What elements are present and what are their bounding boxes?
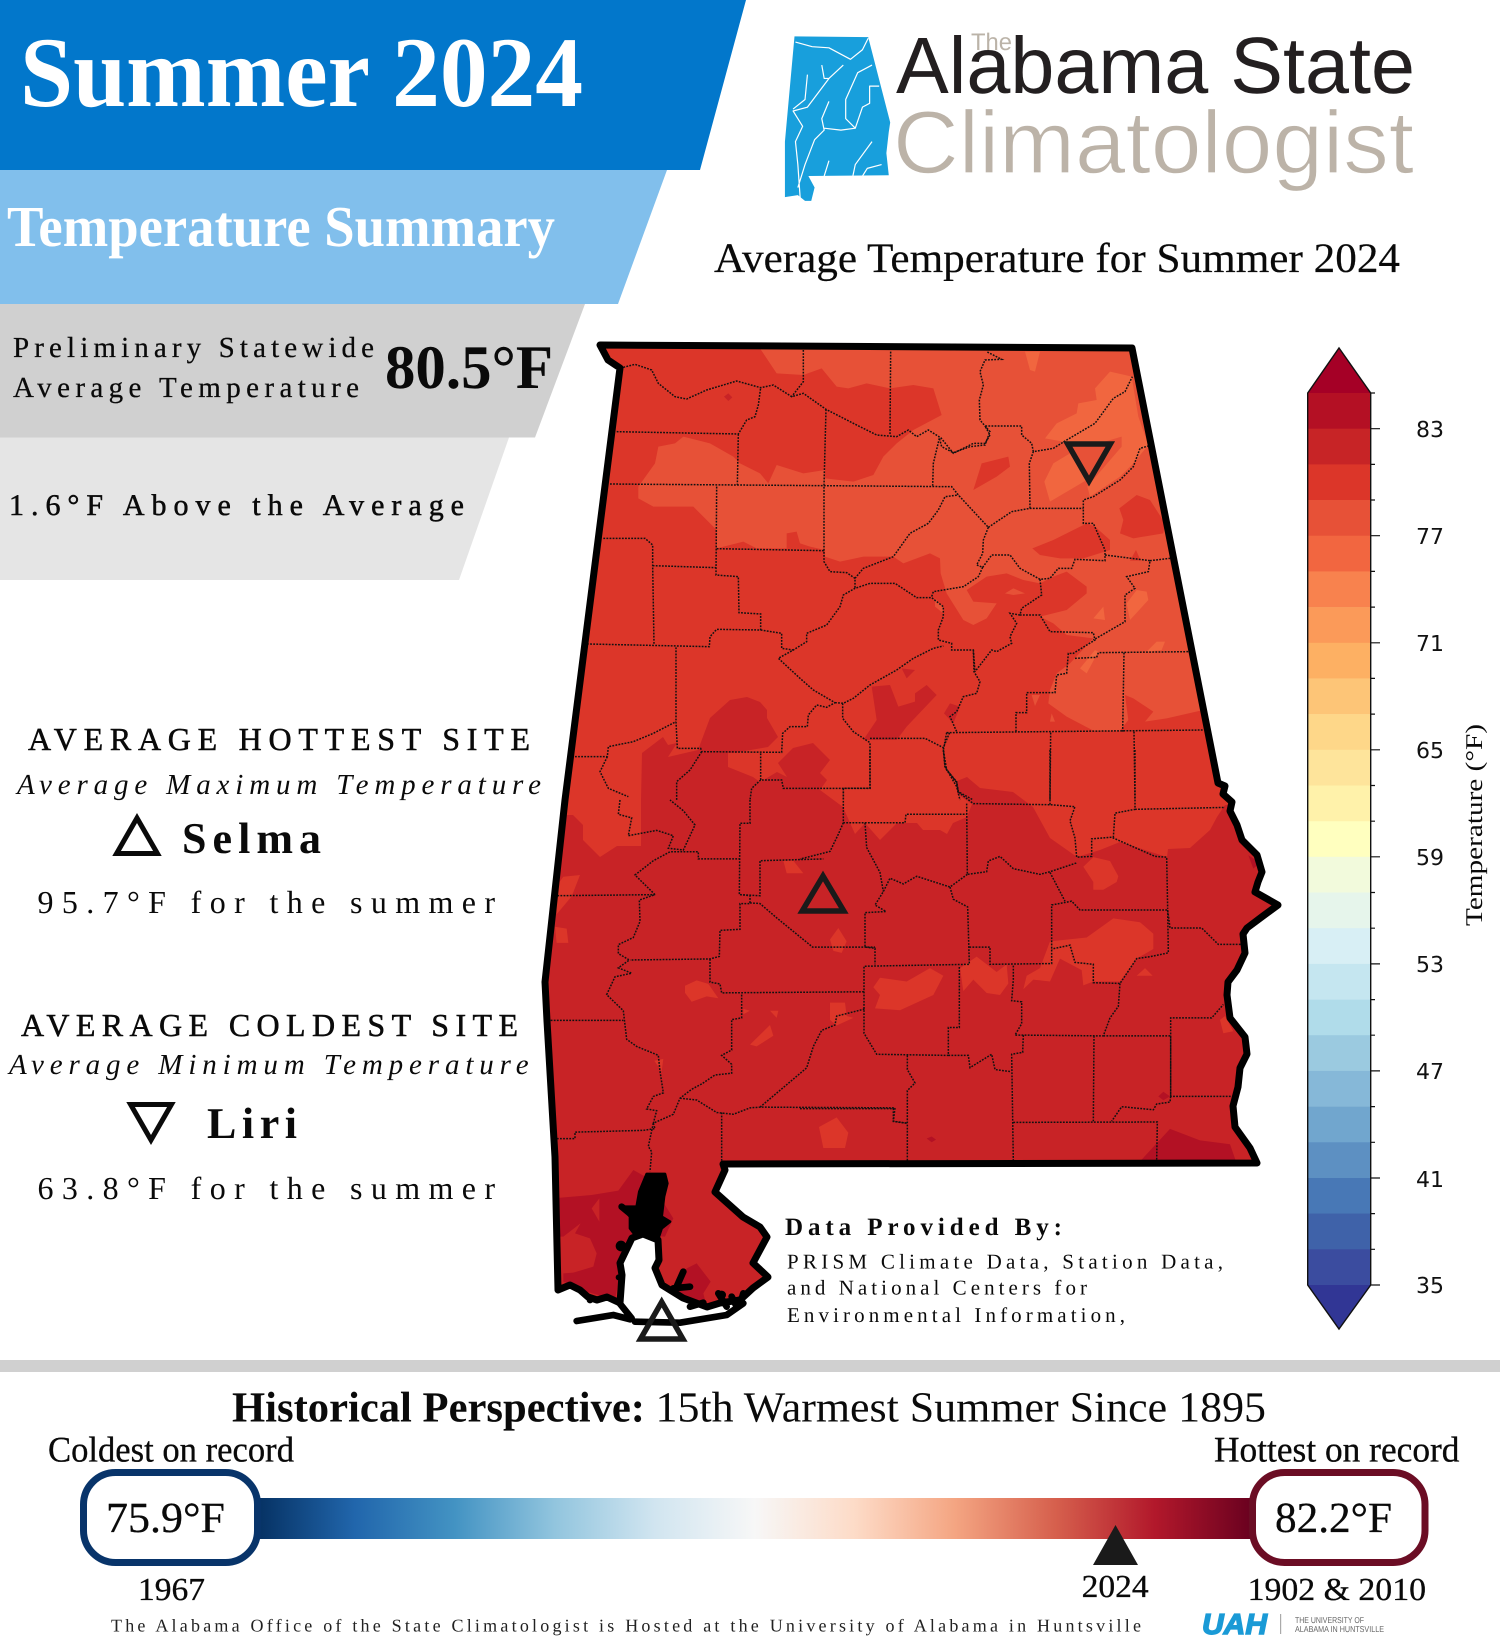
logo icon: blue Alabama map with rivers: [785, 36, 890, 201]
historical perspective heading: Historical Perspective:: [232, 1384, 645, 1432]
UAH logo: UAH: [1202, 1609, 1268, 1641]
title banner: Summer 2024: Summer 2024: [20, 17, 583, 128]
colorbar axis label: Temperature (°F): [1462, 724, 1488, 926]
map heading: Average Temperature for Summer 2024: [714, 236, 1400, 282]
panel: average coldest site: AVERAGE COLDEST SITE: [21, 1007, 518, 1043]
data source note: [785, 1214, 1223, 1327]
panel: statewide average temperature: 80.5°F: [385, 334, 553, 402]
2024 marker: 2024: [1082, 1568, 1149, 1604]
panel: statewide average temperature: Preliminary Statewide: [13, 332, 374, 364]
icon: coldest triangle: [131, 1104, 171, 1140]
panel: average hottest site: Average Maximum Temperature: [15, 769, 541, 801]
data source note: PRISM Climate Data, Station Data,: [787, 1250, 1223, 1274]
panel: average hottest site: [15, 721, 541, 920]
data source note: Data Provided By:: [785, 1214, 1062, 1241]
historical range scale: [48, 1430, 1460, 1607]
colorbar tick labels: 41: [1416, 1168, 1444, 1193]
colorbar tick labels: 47: [1416, 1060, 1444, 1085]
panel: average coldest site: 63.8°F for the summer: [38, 1170, 495, 1206]
colorbar legend: [1308, 348, 1488, 1329]
panel: average hottest site: AVERAGE HOTTEST SITE: [28, 721, 530, 757]
logo text: Climatologist: Climatologist: [893, 92, 1414, 192]
colorbar bands: [1308, 348, 1371, 1329]
marker: gulf coast triangle: [640, 1302, 683, 1339]
panel: average coldest site: [7, 1007, 529, 1206]
coldest on record callout: 1967: [138, 1571, 205, 1607]
footer hosting statement: The Alabama Office of the State Climatologist is Hosted at the University of Alabama in Huntsville: [111, 1616, 1141, 1636]
hottest on record callout: 82.2°F: [1275, 1495, 1392, 1542]
subtitle banner: Temperature Summary: [0, 170, 667, 304]
icon: hottest triangle: [117, 818, 157, 854]
coldest on record callout: Coldest on record: [48, 1430, 294, 1470]
data source note: and National Centers for: [787, 1276, 1087, 1300]
UAH logo: [1202, 1609, 1384, 1641]
historical perspective heading: [232, 1384, 1266, 1432]
title banner: Summer 2024: [0, 0, 746, 170]
panel: departure from average: 1.6°F Above the Average: [9, 489, 464, 522]
panel: average coldest site: Liri: [207, 1099, 297, 1148]
colorbar ticks: [1371, 393, 1380, 1285]
panel: statewide average temperature: [0, 304, 585, 438]
colorbar tick labels: 35: [1416, 1274, 1444, 1299]
logo text: The: The: [971, 29, 1012, 56]
coldest on record callout: 75.9°F: [106, 1495, 225, 1542]
2024 marker: [1082, 1525, 1149, 1604]
gradient bar: [255, 1498, 1255, 1539]
colorbar tick labels: 83: [1416, 418, 1444, 443]
UAH logo: ALABAMA IN HUNTSVILLE: [1295, 1624, 1384, 1634]
choropleth map of Alabama: [530, 330, 1310, 1350]
marker: hottest site Selma: [802, 876, 844, 911]
colorbar tick labels: 65: [1416, 739, 1444, 764]
subtitle banner: Temperature Summary: Temperature Summary: [7, 194, 555, 259]
mobile bay and gulf coast detail: [577, 1174, 747, 1323]
colorbar tick labels: 71: [1416, 632, 1444, 657]
hottest on record callout: Hottest on record: [1214, 1430, 1460, 1470]
marker: coldest site Liri: [1068, 444, 1110, 481]
UAH logo: THE UNIVERSITY OF: [1295, 1615, 1364, 1625]
colorbar tick labels: [1416, 418, 1444, 1299]
coldest on record callout: [48, 1430, 294, 1607]
hottest on record callout: 1902 & 2010: [1248, 1571, 1426, 1607]
colorbar tick labels: 59: [1416, 846, 1444, 871]
panel: departure from average: [0, 438, 509, 580]
county boundaries: [551, 350, 1242, 1171]
colorbar tick labels: 53: [1416, 953, 1444, 978]
data source note: Environmental Information,: [787, 1303, 1125, 1327]
panel: statewide average temperature: Average Temperature: [13, 372, 359, 404]
panel: average coldest site: Average Minimum Temperature: [7, 1049, 529, 1081]
hottest on record callout: [1214, 1430, 1460, 1607]
logo: The Alabama State Climatologist: [785, 21, 1415, 201]
section divider: [0, 1360, 1500, 1372]
panel: average hottest site: 95.7°F for the summer: [38, 884, 495, 920]
logo text: Alabama State: Alabama State: [896, 21, 1415, 110]
panel: average hottest site: Selma: [182, 814, 321, 863]
state outline: [545, 345, 1278, 1307]
colorbar tick labels: 77: [1416, 525, 1444, 550]
historical perspective heading: 15th Warmest Summer Since 1895: [656, 1384, 1266, 1432]
temperature contour fills: [548, 348, 1272, 1304]
